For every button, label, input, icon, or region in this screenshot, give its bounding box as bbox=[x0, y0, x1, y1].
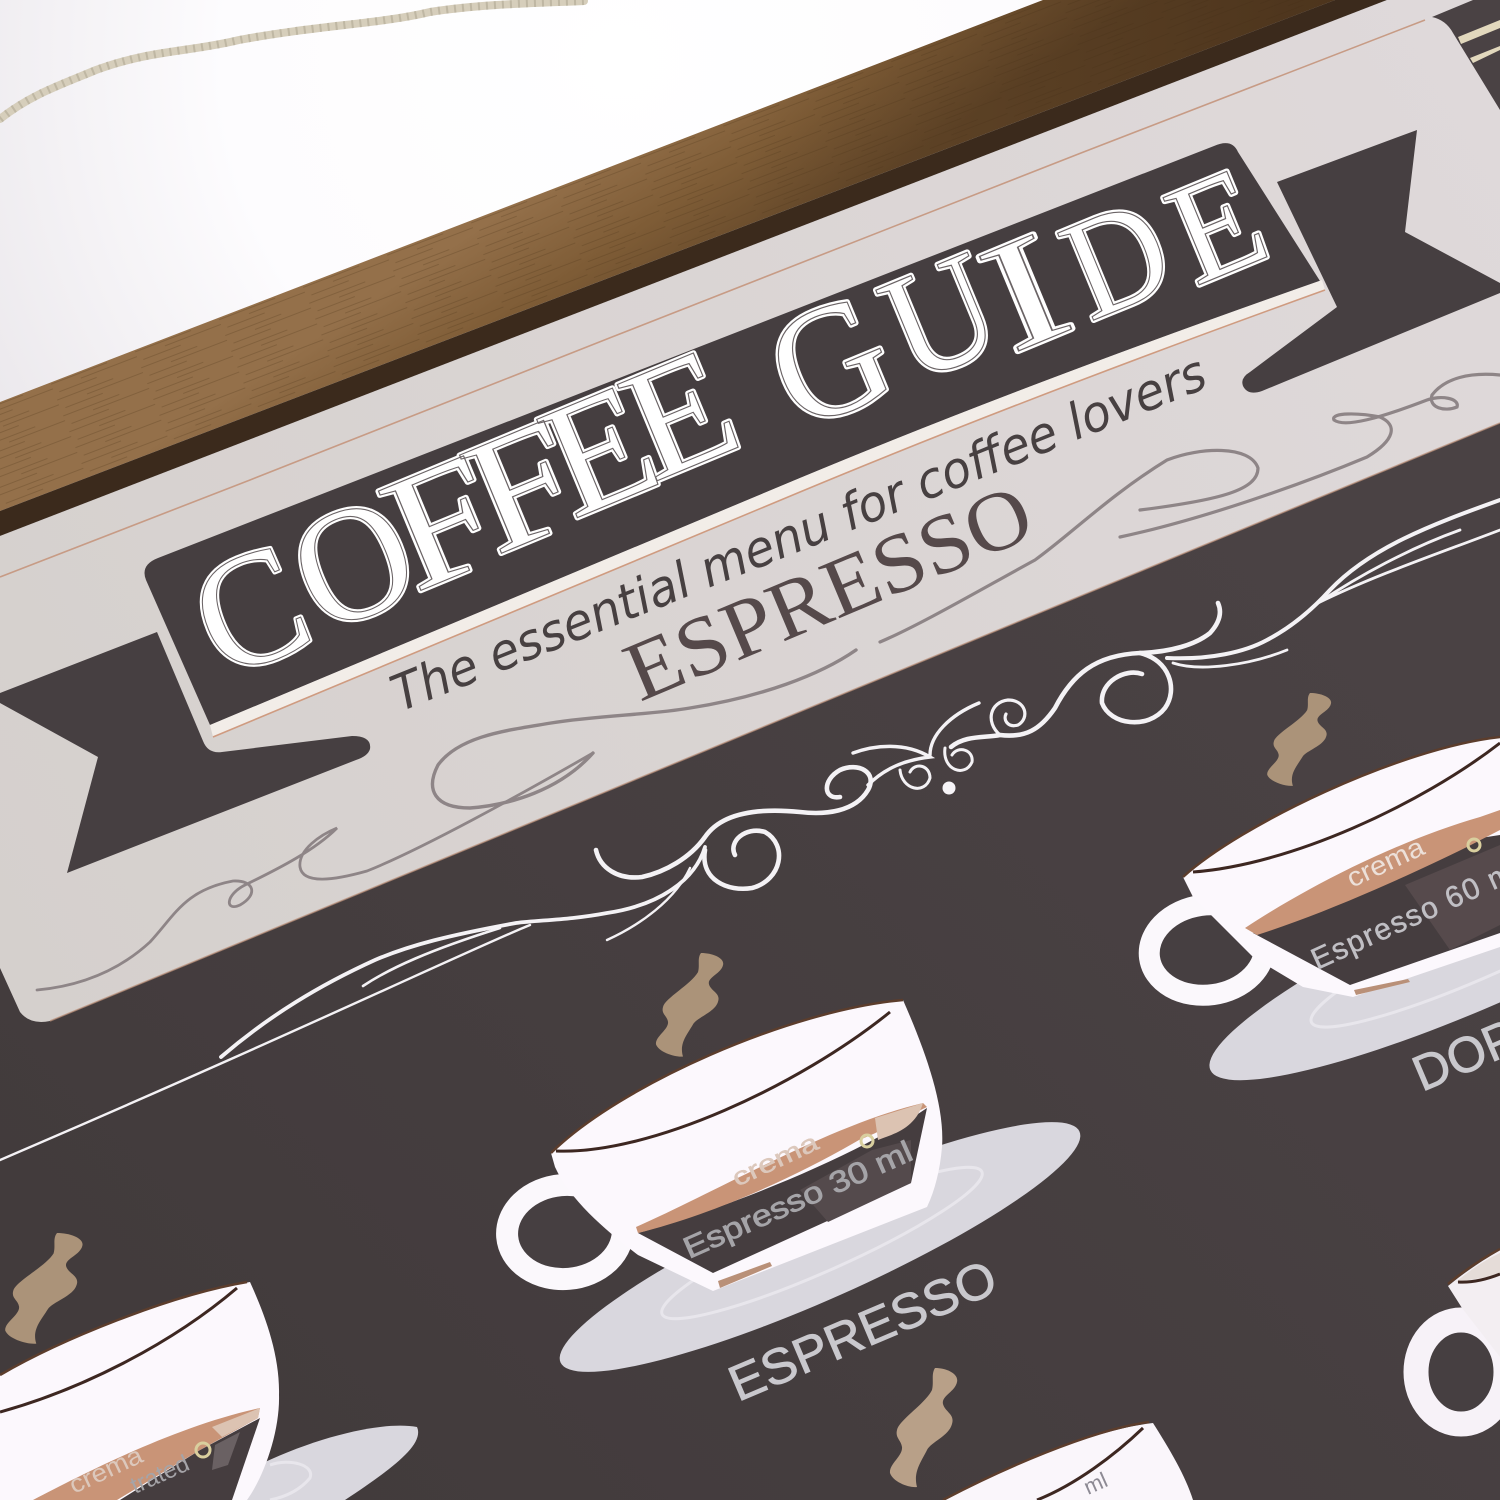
rim bbox=[1183, 737, 1500, 877]
crema marker bbox=[1468, 839, 1480, 851]
top right stripes bbox=[1458, 20, 1500, 63]
panel flourishes bbox=[37, 374, 1500, 990]
title inline detail: D bbox=[1041, 167, 1192, 351]
title: COFFEE GUIDE: U bbox=[860, 219, 1022, 415]
crema marker bbox=[861, 1135, 873, 1147]
cup body bbox=[1183, 737, 1500, 997]
coffee liquid bbox=[638, 1108, 927, 1273]
crema label: crema bbox=[1342, 831, 1430, 893]
left long flourish bbox=[221, 847, 705, 1057]
icon: steam bottom centre bbox=[890, 1368, 957, 1487]
title inline detail: I bbox=[958, 197, 1091, 385]
title: COFFEE GUIDE: G bbox=[744, 258, 915, 464]
rim bbox=[943, 1422, 1149, 1500]
volume label: trated bbox=[126, 1450, 194, 1499]
cup: espresso bbox=[503, 1000, 1101, 1410]
cup name: ESPRESSO: ESPRESSO bbox=[720, 1249, 1005, 1412]
title: COFFEE GUIDE: F bbox=[359, 418, 525, 627]
ribbon right tail bbox=[1242, 130, 1500, 393]
right long flourish bbox=[1167, 500, 1500, 658]
rim bbox=[551, 1000, 903, 1153]
right spiral bbox=[1102, 653, 1171, 722]
title inline detail bbox=[167, 135, 1287, 713]
centre scrolls bbox=[853, 703, 979, 785]
title: COFFEE GUIDE: E bbox=[517, 347, 681, 552]
left thin flourish bbox=[0, 868, 690, 1160]
ornamental divider bbox=[0, 500, 1500, 1160]
left spiral bbox=[704, 831, 779, 889]
left scroll bbox=[596, 767, 871, 877]
title inline detail: F bbox=[440, 383, 604, 588]
heading: ESPRESSO: ESPRESSO bbox=[611, 466, 1046, 720]
icon: steam espresso bbox=[656, 953, 723, 1057]
ribbon white stripe bbox=[210, 280, 1325, 737]
cup body bbox=[943, 1423, 1193, 1500]
title inline detail: F bbox=[359, 418, 525, 627]
title inline detail: E bbox=[1146, 135, 1287, 315]
crema label: crema bbox=[728, 1128, 823, 1192]
small right loop bbox=[991, 700, 1025, 735]
icon: steam concentrated bbox=[5, 1233, 83, 1344]
title: COFFEE GUIDE bbox=[167, 135, 1287, 713]
saucer bbox=[1188, 771, 1500, 1121]
cup body bbox=[551, 1000, 942, 1291]
subtitle: The essential menu for coffee lovers bbox=[383, 344, 1214, 723]
title inline detail: E bbox=[599, 313, 761, 515]
saucer bbox=[539, 1084, 1101, 1410]
cup body bbox=[0, 1282, 279, 1500]
handle bbox=[1416, 1320, 1500, 1424]
handle bbox=[1143, 897, 1271, 1003]
title inline detail: C bbox=[167, 507, 333, 713]
crema marker bbox=[196, 1443, 210, 1457]
title: COFFEE GUIDE: O bbox=[266, 458, 440, 668]
ribbon orange line bbox=[213, 290, 1325, 737]
crema label: crema bbox=[65, 1441, 147, 1499]
volume label: Espresso 30 ml bbox=[678, 1135, 918, 1265]
title: COFFEE GUIDE: E bbox=[1146, 135, 1287, 315]
crema layer bbox=[1245, 810, 1500, 935]
beige header panel bbox=[0, 0, 1500, 1022]
centre dot bbox=[942, 782, 956, 794]
title inline detail: G bbox=[744, 258, 915, 464]
cup: right edge bbox=[1416, 1249, 1500, 1424]
title: COFFEE GUIDE: E bbox=[599, 313, 761, 515]
title inline detail: O bbox=[266, 458, 440, 668]
title: COFFEE GUIDE: C bbox=[167, 507, 333, 713]
crema layer bbox=[636, 1103, 927, 1233]
rim bbox=[0, 1282, 247, 1412]
crema layer bbox=[33, 1408, 260, 1500]
title inline detail: E bbox=[517, 347, 681, 552]
saucer bbox=[230, 1426, 418, 1500]
rim bbox=[1448, 1249, 1500, 1284]
ribbon centre band bbox=[144, 143, 1320, 725]
hanging rope bbox=[0, 1, 584, 119]
title: COFFEE GUIDE: D bbox=[1041, 167, 1192, 351]
title: COFFEE GUIDE: F bbox=[440, 383, 604, 588]
ribbon left tail bbox=[0, 632, 370, 873]
title: COFFEE GUIDE: I bbox=[958, 197, 1091, 385]
volume label: ml bbox=[1080, 1467, 1111, 1500]
right scroll bbox=[951, 603, 1220, 747]
cup body bbox=[1448, 1250, 1500, 1357]
cup: concentrated bbox=[0, 1282, 418, 1500]
icon: steam doppio bbox=[1267, 693, 1331, 786]
coffee liquid bbox=[120, 1418, 260, 1500]
coffee liquid bbox=[1253, 835, 1500, 985]
wooden hanger bar bbox=[0, 0, 1387, 536]
ribbon banner bbox=[0, 130, 1500, 873]
cup: bottom centre bbox=[943, 1422, 1193, 1500]
handle bbox=[503, 1180, 627, 1284]
thin border line on panel bbox=[0, 20, 1425, 577]
cup: doppio bbox=[1143, 737, 1500, 1121]
title inline detail: U bbox=[860, 219, 1022, 415]
